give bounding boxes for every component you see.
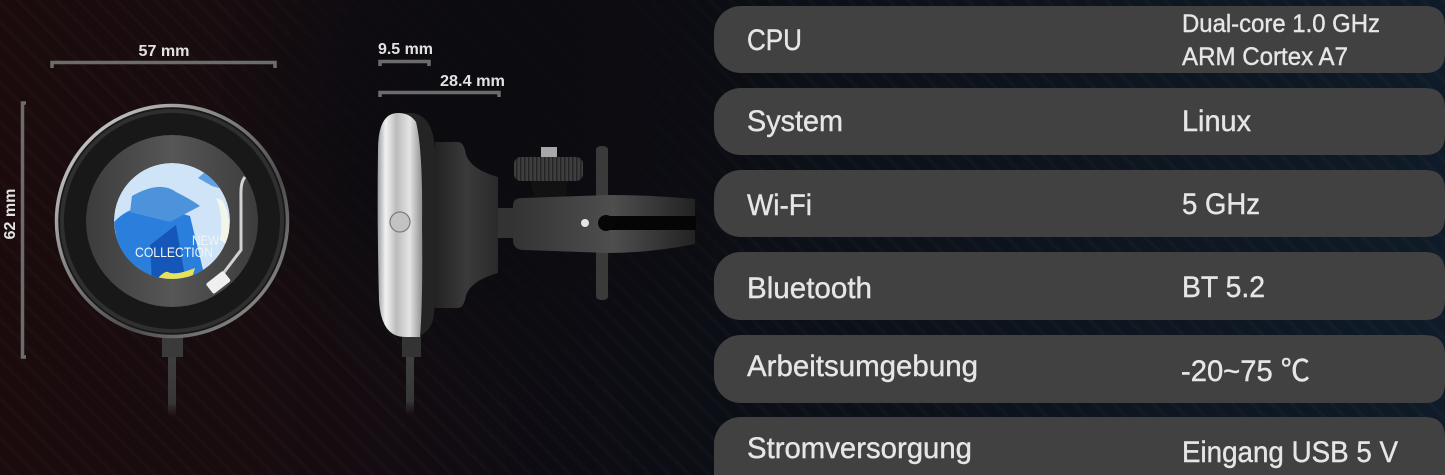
- dimension: 28.4 mm: 28.4 mm: [440, 73, 505, 90]
- spec row: CPU: [714, 6, 1445, 73]
- screen text: [135, 232, 220, 260]
- spec row: Arbeitsumgebung: [714, 335, 1445, 403]
- spec row: System: Linux: [1182, 105, 1251, 138]
- spec row: CPU: CPU: [747, 24, 802, 57]
- spec row: Bluetooth: Bluetooth: [747, 272, 872, 305]
- spec row: Stromversorgung: [714, 417, 1445, 475]
- screen artwork: [114, 159, 230, 284]
- silver body: [378, 113, 438, 337]
- spec row: Stromversorgung: Eingang USB 5 V: [1182, 436, 1398, 469]
- vinyl disc: [86, 135, 258, 307]
- dimension: 57 mm: [52, 43, 275, 68]
- knob: [514, 147, 583, 197]
- spec row: System: System: [747, 105, 843, 138]
- connector: [495, 208, 515, 238]
- tonearm: [206, 177, 245, 294]
- clamp: [513, 195, 696, 253]
- dimension: 9.5 mm: 9.5 mm: [378, 41, 433, 58]
- clip fin: [596, 146, 608, 300]
- spec row: Wi-Fi: [714, 170, 1445, 237]
- spec row: Bluetooth: [714, 252, 1445, 320]
- spec row: Wi-Fi: Wi-Fi: [747, 189, 812, 222]
- front cable: [162, 336, 183, 416]
- magnetic mount: [435, 142, 498, 308]
- spec row: Wi-Fi: 5 GHz: [1182, 188, 1260, 221]
- side button: [284, 211, 289, 232]
- spec row: Bluetooth: BT 5.2: [1182, 271, 1265, 304]
- dimension: 62 mm: [2, 103, 26, 357]
- front view device: [56, 106, 289, 416]
- dimension: 28.4 mm: [380, 73, 505, 97]
- spec row: System: [714, 88, 1445, 155]
- spec row: Arbeitsumgebung: Arbeitsumgebung: [747, 350, 978, 383]
- dimension: 9.5 mm: [378, 41, 433, 66]
- side button: [390, 212, 410, 232]
- screen text: NEW: [192, 232, 220, 248]
- spec row: Arbeitsumgebung: -20~75 ℃: [1181, 355, 1310, 388]
- spec row: CPU: ARM Cortex A7: [1182, 43, 1348, 71]
- screen text: COLLECTION: [135, 244, 213, 260]
- side view device: [378, 113, 696, 414]
- dimension: 57 mm: 57 mm: [138, 43, 190, 60]
- outer ring: [56, 106, 288, 336]
- spec row: CPU: Dual-core 1.0 GHz: [1182, 10, 1380, 38]
- dimension: 62 mm: 62 mm: [2, 188, 19, 240]
- side cable: [402, 335, 421, 414]
- spec row: Stromversorgung: Stromversorgung: [747, 432, 972, 465]
